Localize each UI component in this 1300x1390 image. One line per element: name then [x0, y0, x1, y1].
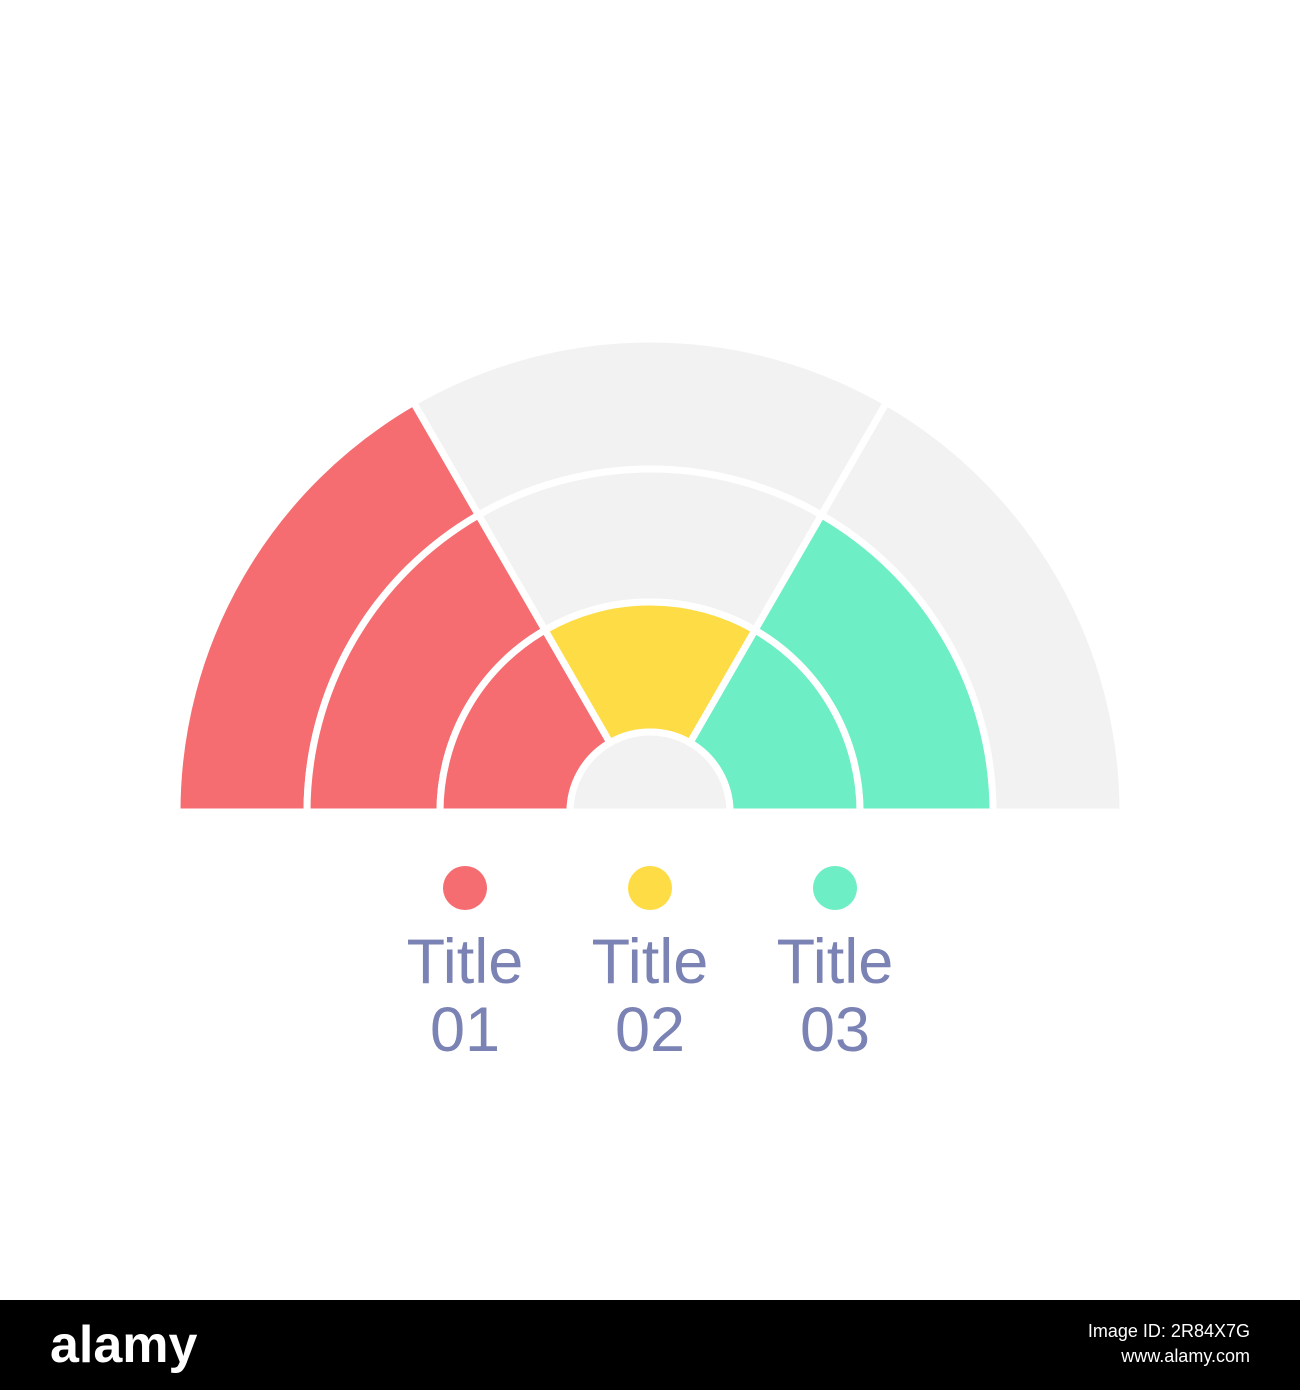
- hub: [570, 732, 730, 812]
- sector: middle gray middle: [478, 469, 822, 630]
- bottom mask line: [170, 813, 1130, 821]
- legend item 03: Title: [777, 927, 893, 997]
- sector: right green middle: [755, 515, 993, 812]
- sector: middle yellow inner: [545, 602, 755, 743]
- legend item 01: 01: [430, 995, 500, 1065]
- sector: right green inner: [690, 630, 860, 812]
- legend item 02: Title: [592, 927, 708, 997]
- legend item 01: [407, 866, 523, 1065]
- footer bar: alamy: [50, 1316, 198, 1374]
- legend item 03: 03: [800, 995, 870, 1065]
- legend item 01: Title: [407, 927, 523, 997]
- footer bar: Image ID: 2R84X7G: [1088, 1321, 1250, 1341]
- sector: left red inner: [440, 630, 610, 812]
- legend item 02: 02: [615, 995, 685, 1065]
- sector: right gray outer: [822, 402, 1123, 812]
- sector: left red middle: [307, 515, 545, 812]
- sector: left red outer: [177, 402, 478, 812]
- legend item 03: [777, 866, 893, 1065]
- legend: [407, 866, 893, 1065]
- chart: concentric semicircle rings: [177, 339, 1123, 812]
- footer bar: www.alamy.com: [1120, 1346, 1250, 1366]
- footer bar: [0, 1300, 1300, 1390]
- legend item 02: [592, 866, 708, 1065]
- sector: middle gray outer: [414, 339, 886, 515]
